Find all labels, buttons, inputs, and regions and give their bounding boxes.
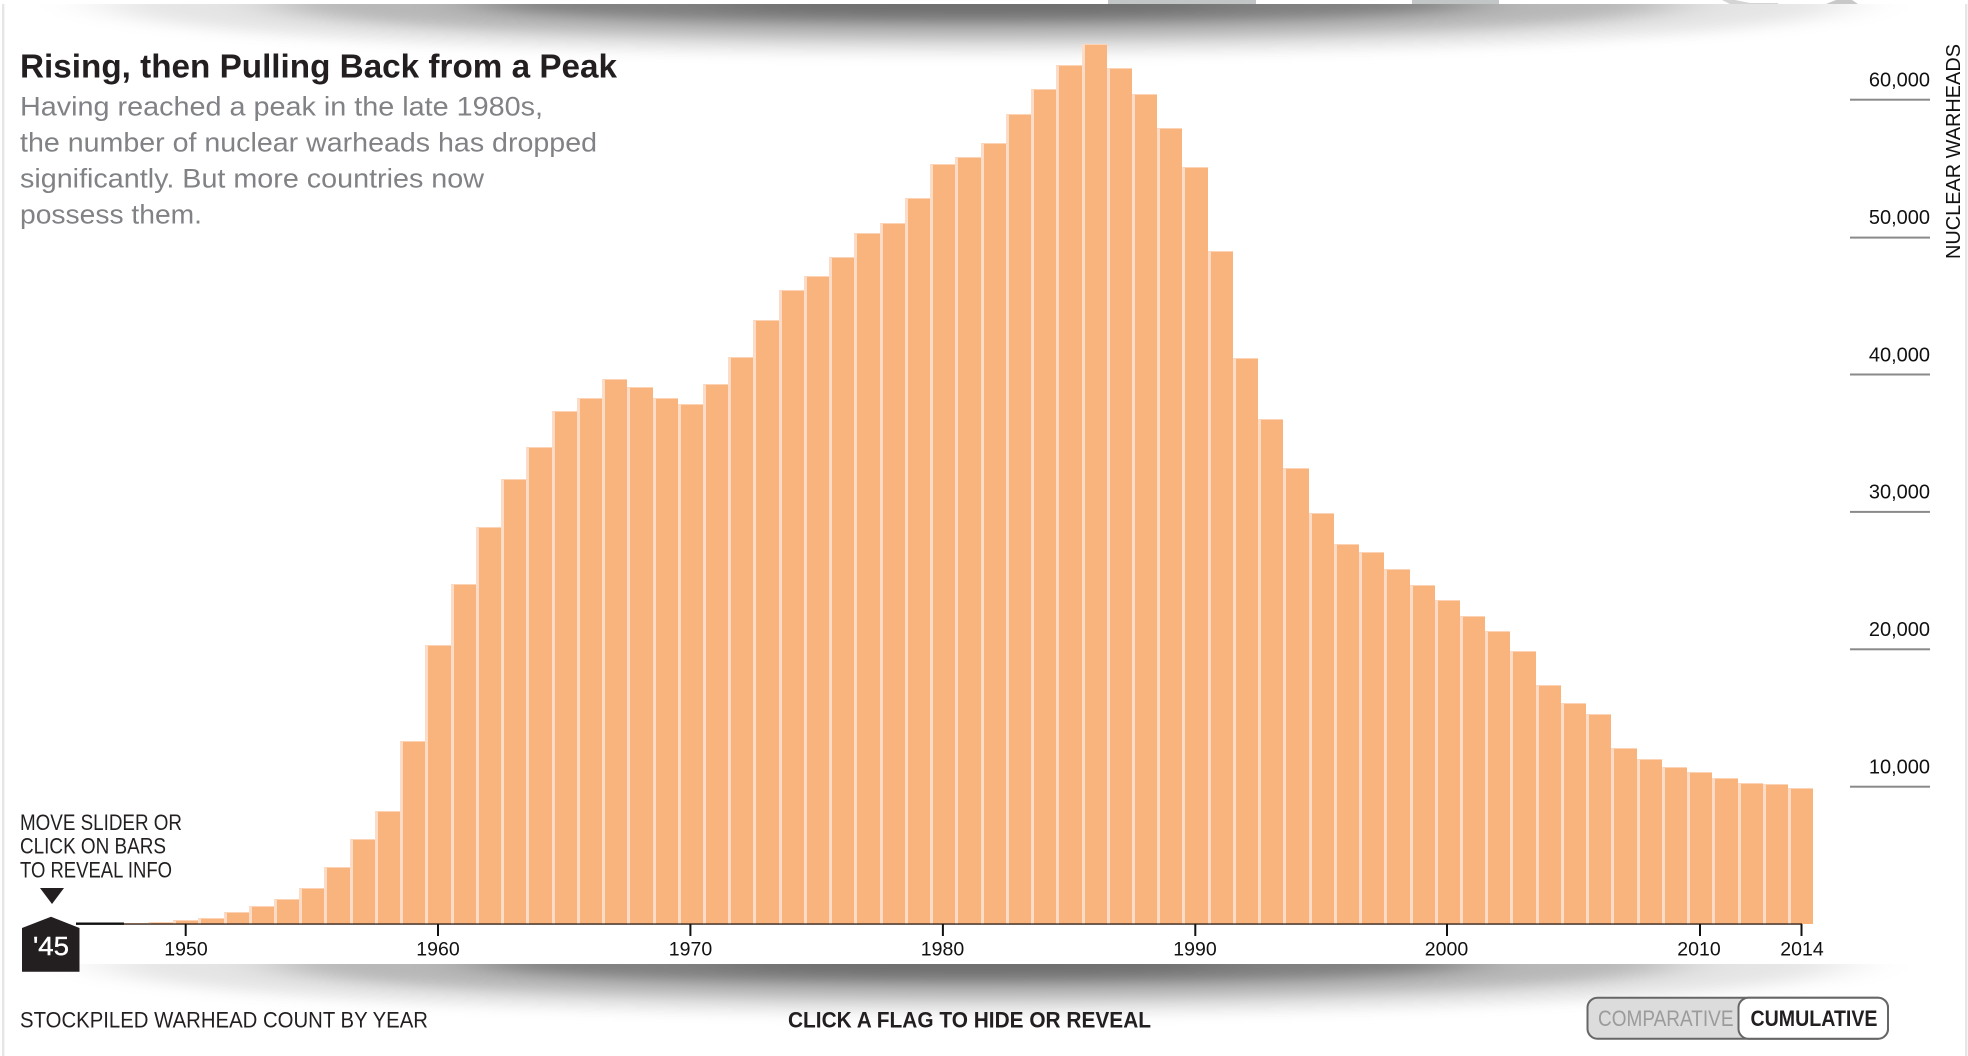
x axis: years [76, 922, 1824, 961]
x axis: years: 1960 [416, 939, 460, 961]
slider flag: '45 [33, 931, 69, 961]
y axis title: NUCLEAR WARHEADS [1942, 44, 1965, 259]
slider flag [22, 917, 80, 972]
description text: Having reached a peak in the late 1980s, [20, 92, 543, 122]
description text [20, 92, 597, 230]
toggle: comparative / cumulative: COMPARATIVE [1598, 1006, 1734, 1031]
y axis: warhead scale [1850, 70, 1930, 788]
flag instruction: CLICK A FLAG TO HIDE OR REVEAL [788, 1007, 1151, 1032]
x axis: years: 1980 [921, 939, 964, 961]
x axis: years: 2000 [1425, 939, 1468, 961]
slider instructions: CLICK ON BARS [20, 834, 166, 858]
y axis: warhead scale: 40,000 [1869, 344, 1930, 366]
description text: possess them. [20, 200, 202, 230]
x axis: years: 1970 [669, 939, 712, 961]
description text: the number of nuclear warheads has dropped [20, 128, 597, 158]
description text: significantly. But more countries now [20, 164, 485, 194]
y axis: warhead scale: 20,000 [1869, 619, 1930, 641]
chart caption: STOCKPILED WARHEAD COUNT BY YEAR [20, 1007, 428, 1032]
y axis: warhead scale: 60,000 [1869, 70, 1930, 92]
slider instructions: TO REVEAL INFO [20, 858, 172, 883]
x axis: years: 2010 [1677, 939, 1721, 961]
title: Rising, then Pulling Back from a Peak [20, 48, 618, 84]
y axis: warhead scale: 30,000 [1869, 482, 1930, 504]
x axis: years: 1950 [164, 939, 208, 961]
x axis: years: 1990 [1173, 939, 1217, 961]
x axis: years: 2014 [1780, 939, 1824, 961]
bar chart: warheads by year, 1948 to 2014 [124, 44, 1813, 924]
toggle: comparative / cumulative [1588, 998, 1888, 1039]
slider instructions [20, 810, 182, 883]
icon: slider pointer triangle [40, 888, 64, 904]
y axis: warhead scale: 10,000 [1869, 756, 1930, 778]
slider instructions: MOVE SLIDER OR [20, 810, 182, 835]
y axis: warhead scale: 50,000 [1869, 207, 1930, 229]
toggle: comparative / cumulative: CUMULATIVE [1750, 1006, 1878, 1031]
